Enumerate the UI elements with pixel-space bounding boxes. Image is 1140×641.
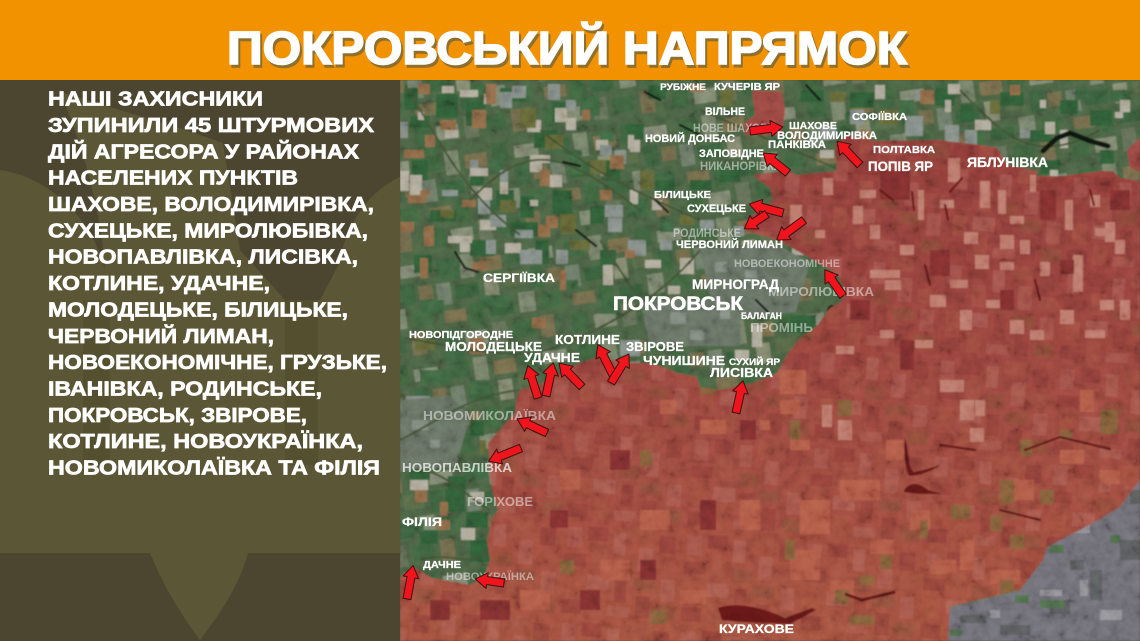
settlement labels white: БІЛИЦЬКЕ [654, 190, 711, 201]
settlement labels white: СУХЕЦЬКЕ [687, 203, 746, 215]
settlement labels white: ЗАПОВІДНЕ [699, 148, 764, 160]
settlement labels white: РУБІЖНЕ [660, 82, 706, 92]
text block: summary: НОВОМИКОЛАЇВКА ТА ФІЛІЯ [48, 457, 380, 480]
arrow: Nove Shakhove [749, 119, 784, 139]
arrow: Udachne [538, 361, 561, 398]
settlement labels faded: ГОРІХОВЕ [467, 494, 533, 509]
settlement labels white: ПОЛТАВКА [873, 145, 935, 156]
settlement labels white: ЗВІРОВЕ [626, 339, 684, 354]
occupied territory: red overlay [400, 80, 1140, 641]
settlement labels white [402, 82, 1048, 636]
arrow: Novopavlivka [486, 441, 524, 469]
arrow: Dachne [399, 564, 421, 600]
arrow: Zvirove [604, 350, 636, 387]
settlement labels white: ШАХОВЕ [789, 121, 837, 132]
arrow: Molodetske [520, 363, 546, 400]
arrow: Sukhetske east [747, 196, 785, 221]
text block: summary: МОЛОДЕЦЬКЕ, БІЛИЦЬКЕ, [48, 299, 348, 321]
arrow: Zapovidne [758, 147, 793, 179]
settlement labels white: ВІЛЬНЕ [705, 106, 745, 118]
left panel background [0, 80, 400, 641]
text block: summary: ЧЕРВОНИЙ ЛИМАН, [48, 324, 274, 348]
settlement labels faded [402, 121, 875, 583]
terrain: grey fields [400, 84, 1030, 406]
text block: summary: НАСЕЛЕНИХ ПУНКТІВ [48, 168, 298, 190]
occupied fields: pale pink [790, 158, 1130, 442]
settlement labels white: КУЧЕРІВ ЯР [714, 82, 780, 93]
arrow: Novomykolaivka [514, 412, 550, 440]
settlement labels white: ЧУНИШИНЕ [643, 353, 725, 368]
contested red patch, right edge [1127, 138, 1140, 172]
settlement labels white: ЛИСІВКА [710, 365, 774, 380]
header bar [0, 0, 1140, 80]
text block: summary: НОВОЕКОНОМІЧНЕ, ГРУЗЬКЕ, [48, 352, 387, 374]
towns and city areas [400, 242, 810, 472]
text block: summary: ДІЙ АГРЕСОРА У РАЙОНАХ [48, 139, 360, 163]
text block: summary: КОТЛИНЕ, НОВОУКРАЇНКА, [48, 430, 363, 453]
settlement labels white: ПАНКІВКА [768, 139, 826, 151]
arrow: Udachne east [553, 358, 588, 393]
occupied ravines and reservoirs: dark red [880, 178, 1110, 520]
arrow: Novoukrainka [474, 571, 505, 591]
settlement labels faded: НИКАНОРІВКА [700, 159, 782, 173]
photo grain [400, 80, 1140, 641]
settlement labels white: СУХИЙ ЯР [729, 356, 780, 367]
settlement labels white: БАЛАГАН [741, 311, 782, 321]
settlement labels white: ФІЛІЯ [402, 515, 442, 529]
terrain: brown fields [400, 84, 1020, 530]
settlement labels white: МОЛОДЕЦЬКЕ [445, 339, 542, 354]
settlement labels white: ПОКРОВСЬК [613, 294, 743, 315]
occupied fields: dark red [430, 170, 1130, 620]
settlement labels white: КОТЛИНЕ [555, 332, 620, 347]
occupied fields: olive-brown [560, 380, 1118, 625]
settlement labels faded: НОВОПАВЛІВКА [402, 460, 513, 475]
terrain: pale fields [400, 84, 1130, 540]
arrow: Sukhetske south [740, 207, 771, 235]
red attack arrows [399, 119, 866, 600]
settlement labels white: ЯБЛУНІВКА [967, 154, 1048, 170]
settlement labels white: СОФІЇВКА [852, 110, 907, 123]
terrain: olive fields [415, 90, 1000, 454]
settlement labels white: УДАЧНЕ [524, 350, 580, 365]
text block: summary: НАШІ ЗАХИСНИКИ [48, 89, 263, 111]
settlement labels faded: МИРОЛЮБІВКА [768, 284, 875, 299]
settlement labels white: КУРАХОВЕ [719, 622, 794, 636]
settlement labels white: ЧЕРВОНИЙ ЛИМАН [676, 238, 783, 251]
pond near Myrolyubivka [827, 305, 837, 317]
grey urban zone, bottom right [948, 470, 1140, 641]
settlement labels white: ДАЧНЕ [423, 560, 461, 571]
text block: summary: ПОКРОВСЬК, ЗВІРОВЕ, [48, 405, 307, 427]
reservoir: dark water, top right [1043, 133, 1108, 151]
terrain: green fields [404, 85, 1114, 562]
settlement labels white: МИРНОГРАД [692, 276, 779, 292]
trident emblem watermark [0, 92, 400, 640]
settlement labels white: СЕРГІЇВКА [483, 270, 555, 285]
settlement labels faded: НОВОМИКОЛАЇВКА [423, 408, 557, 423]
settlement labels faded: ПРОМІНЬ [750, 320, 813, 335]
satellite map [400, 80, 1140, 641]
text block: summary [48, 89, 387, 480]
text block: summary: КОТЛИНЕ, УДАЧНЕ, [48, 273, 270, 295]
settlement labels white: НОВОПІДГОРОДНЕ [409, 330, 513, 341]
settlement labels faded: НОВОЕКОНОМІЧНЕ [734, 258, 840, 270]
arrow: Myrolyubivka [818, 265, 850, 301]
arrow: Volodymyrivka [831, 136, 866, 171]
arrow: Lysivka [728, 379, 751, 415]
settlement labels faded: РОДИНСЬКЕ [673, 226, 741, 240]
occupied fields: bright orange-red [520, 370, 1120, 610]
title: ПОКРОВСЬКИЙ НАПРЯМОК [227, 22, 908, 74]
settlement labels white: НОВИЙ ДОНБАС [645, 132, 735, 145]
contested red patch near Nove Shakhove [745, 90, 785, 135]
text block: summary: ІВАНІВКА, РОДИНСЬКЕ, [48, 378, 322, 400]
text block: summary: ЗУПИНИЛИ 45 ШТУРМОВИХ [48, 115, 375, 137]
settlement labels white: ПОПІВ ЯР [868, 158, 933, 174]
ponds and ravines: dark water in green zone [455, 85, 820, 312]
text block: summary: ШАХОВЕ, ВОЛОДИМИРІВКА, [48, 194, 374, 216]
text block: summary: СУХЕЦЬКЕ, МИРОЛЮБІВКА, [48, 220, 368, 242]
settlement labels faded: НОВОУКРАЇНКА [446, 570, 534, 583]
tree belts and roads [400, 85, 1100, 560]
text block: summary: НОВОПАВЛІВКА, ЛИСІВКА, [48, 247, 358, 269]
settlement labels white: ВОЛОДИМИРІВКА [777, 130, 877, 142]
arrow: Kotlyne [591, 341, 620, 379]
arrow: Chervonyi Lyman [772, 214, 809, 247]
settlement labels faded: НОВЕ ШАХОВЕ [693, 121, 775, 135]
